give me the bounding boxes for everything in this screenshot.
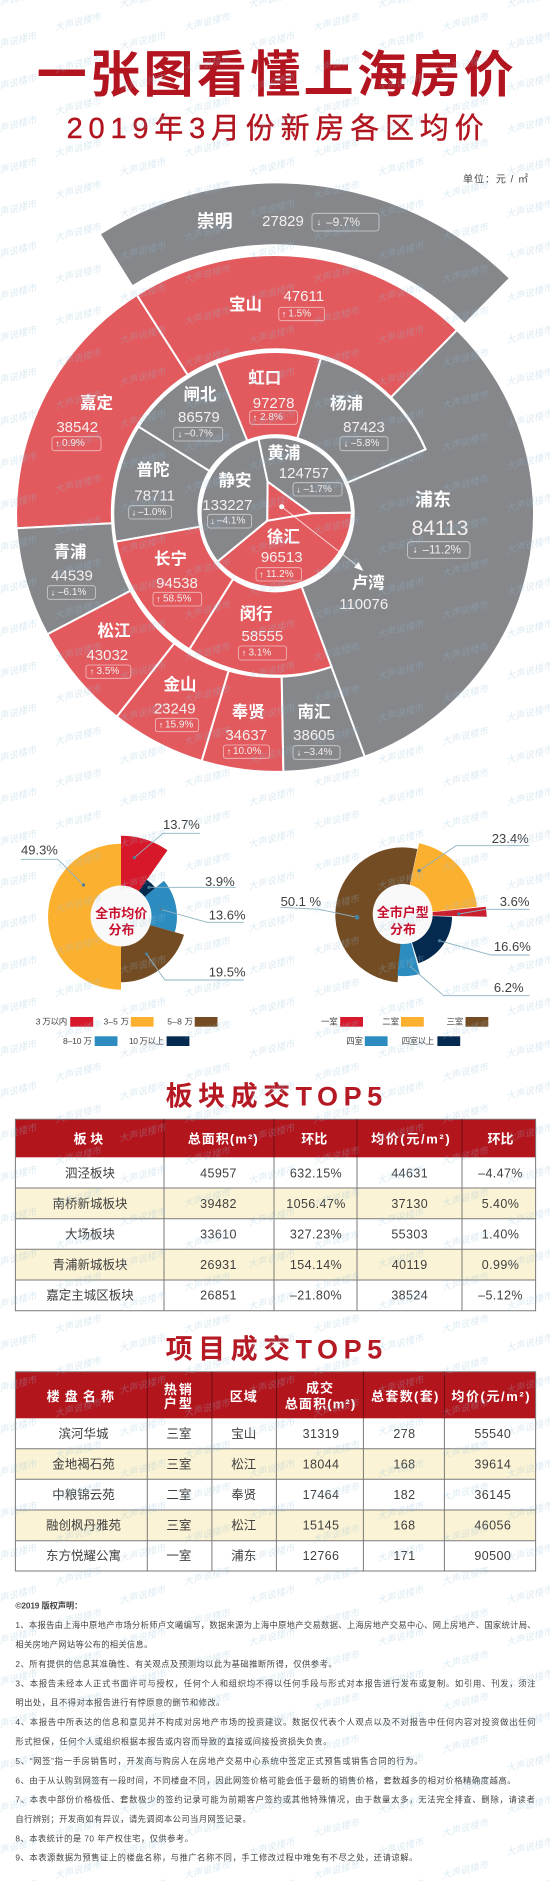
sector: 长宁 <box>116 527 233 649</box>
donut chart: citywide price distribution <box>21 817 246 1046</box>
table row: 南桥新城板块 <box>52 1196 128 1211</box>
sector: 青浦: –6.1% <box>58 587 86 598</box>
callouts: unit type distribution: 16.6% <box>494 939 531 954</box>
table row: 154.14% <box>290 1258 342 1272</box>
table row <box>46 1517 511 1532</box>
sector: 宝山: ↑ <box>282 309 286 319</box>
table row: 滨河华城 <box>58 1426 109 1441</box>
table row <box>65 1227 519 1241</box>
sector: 普陀: –1.0% <box>138 507 166 518</box>
legend: price bands <box>36 1017 217 1046</box>
sector: 松江: 3.5% <box>96 666 119 677</box>
copyright notes: 2、所有提供的信息其准确性、有关观点及预测均以此为基础推断所得，仅供参考。 <box>15 1659 337 1669</box>
copyright notes: 明出处，且不得对本报告进行有悖原意的删节和修改。 <box>15 1698 224 1708</box>
table row: 17464 <box>303 1488 339 1502</box>
callouts: price distribution: 3.9% <box>205 874 235 889</box>
table header: 区域 <box>230 1389 258 1404</box>
sector: 长宁: 94538 <box>156 575 198 592</box>
table row: 金地褐石苑 <box>52 1456 115 1471</box>
sector: 普陀 <box>113 427 209 542</box>
callouts: price distribution: 49.3% <box>21 842 58 858</box>
sector: 徐汇: 11.2% <box>266 569 294 580</box>
sector: 普陀: 78711 <box>134 488 175 504</box>
table row: 171 <box>393 1549 415 1563</box>
copyright notes: 相关房地产网站等公布的相关信息。 <box>15 1639 152 1649</box>
table: project TOP5 <box>15 1372 536 1571</box>
callouts: unit type distribution: 23.4% <box>492 831 529 846</box>
heading: project TOP5: 项目成交TOP5 <box>166 1334 382 1364</box>
sector: 浦东: 浦东 <box>415 489 451 510</box>
sector: 松江: 松江 <box>98 622 130 641</box>
legend: price bands: 5–8 万 <box>167 1017 193 1027</box>
table row: 三室 <box>166 1517 191 1532</box>
table: block TOP5 <box>15 1119 536 1311</box>
legend: unit types: 二室 <box>382 1017 400 1027</box>
legend: unit types <box>321 1017 488 1046</box>
legend: price bands: 3 万以内 <box>36 1017 67 1027</box>
sector: 金山: 23249 <box>154 700 196 718</box>
donut centre label <box>377 905 429 937</box>
table row: 浦东 <box>231 1549 256 1563</box>
table header: 均价(元/m²) <box>371 1132 450 1146</box>
table header: 热销 <box>164 1382 194 1397</box>
sector: 嘉定 <box>16 295 188 528</box>
table row: –4.47% <box>478 1166 523 1180</box>
sector: 闵行: 闵行 <box>240 604 272 623</box>
table row <box>52 1487 511 1502</box>
table row: 宝山 <box>231 1427 256 1441</box>
sector: 青浦: ↓ <box>51 588 55 598</box>
sector: 宝山: 1.5% <box>288 308 311 320</box>
table row: 55540 <box>474 1427 511 1441</box>
table row: 东方悦耀公寓 <box>46 1548 121 1563</box>
sector: 静安 <box>201 439 268 562</box>
sector: 嘉定: 38542 <box>56 419 98 436</box>
sector: 宝山: 宝山 <box>229 294 262 314</box>
sector: 普陀: ↓ <box>132 507 136 517</box>
sector: 青浦: 青浦 <box>54 542 86 562</box>
sector: 静安: –4.1% <box>217 516 245 527</box>
table row: 31319 <box>303 1427 339 1441</box>
table row: 松江 <box>231 1457 256 1471</box>
sector: 闸北: –0.7% <box>184 429 213 440</box>
sector: 浦东: 84113 <box>412 517 468 540</box>
copyright notes: 自行辨别；开发商如有异议，请先调阅本公司当月网签记录。 <box>15 1814 251 1824</box>
unit note: 单位：元 / ㎡ <box>463 172 528 186</box>
sector: 金山: 金山 <box>164 674 196 694</box>
copyright notes: 3、本报告未经本人正式书面许可与授权，任何个人和组织均不得以任何手段与形式对本报告进行发布或复制。如引用、刊发，须注 <box>15 1678 536 1688</box>
table row <box>46 1548 511 1563</box>
copyright notes: 7、本表中部份价格极低、套数极少的签约记录可能为前期客户签约或其他特殊情况，由于数量太多，无法完全排查、删除，请读者 <box>15 1795 535 1805</box>
copyright notes: 形式担保，任何个人或组织根据本报告或内容而导致的直接或间接投资损失负责。 <box>15 1737 331 1747</box>
table row: –21.80% <box>290 1289 342 1303</box>
sector: 金山: 15.9% <box>165 720 193 730</box>
donut centre label <box>95 906 147 938</box>
sector: 徐汇: ↑ <box>259 569 264 579</box>
sector: 奉贤: 10.0% <box>233 746 261 757</box>
table row: 168 <box>393 1457 415 1471</box>
table row: 168 <box>393 1518 415 1532</box>
sector: 南汇: –3.4% <box>304 747 332 758</box>
sector: 长宁: 长宁 <box>154 548 187 568</box>
sector: 杨浦: ↓ <box>344 439 348 449</box>
legend: unit types: 三室 <box>446 1017 464 1027</box>
table row: 中粮锦云苑 <box>52 1487 115 1502</box>
sector: 黄浦: 黄浦 <box>268 442 300 462</box>
table row: 36145 <box>474 1488 511 1502</box>
table row: 大场板块 <box>65 1227 115 1241</box>
table row: 1056.47% <box>286 1197 346 1211</box>
sector: 静安: 静安 <box>218 471 252 490</box>
table row <box>52 1456 511 1471</box>
table row: 嘉定主城区板块 <box>46 1288 134 1303</box>
sector: 徐汇: 96513 <box>261 549 303 566</box>
donut sectors <box>48 836 184 990</box>
table row: 278 <box>393 1427 415 1441</box>
donut sectors <box>335 843 487 982</box>
table header: 楼盘名称 <box>47 1389 114 1404</box>
sector: 崇明: ↓ <box>317 217 321 227</box>
sector: 卢湾: 卢湾 <box>352 572 385 592</box>
sector: 嘉定: ↑ <box>55 439 60 449</box>
callouts: unit type distribution: 3.6% <box>500 894 530 909</box>
sector: 黄浦: –1.7% <box>304 484 332 495</box>
sector: 南汇: ↓ <box>297 748 301 758</box>
table header <box>74 1132 514 1146</box>
legend: unit types: 四室 <box>346 1036 363 1046</box>
table row: 5.40% <box>482 1197 519 1211</box>
sector: 青浦: 44539 <box>51 568 93 584</box>
sector: 松江: ↑ <box>90 667 94 677</box>
sector: 南汇 <box>282 667 365 772</box>
callouts: price distribution: 19.5% <box>209 964 246 980</box>
table row: 12766 <box>303 1549 339 1563</box>
table row: 39614 <box>474 1457 511 1471</box>
table header: 环比 <box>487 1132 514 1146</box>
sector: 嘉定: 0.9% <box>62 438 85 449</box>
table row: 三室 <box>166 1426 191 1441</box>
sector: 闵行: 58555 <box>242 628 283 645</box>
copyright notes: 4、本报告中所表达的信息和意见并不构成对房地产市场的投资建议。数据仅代表个人观点以及不对报告中任何内容对投资做出任何 <box>15 1717 536 1727</box>
sector: 奉贤 <box>202 671 283 772</box>
sector: 卢湾: 110076 <box>339 596 388 613</box>
sector: 闸北: 86579 <box>178 409 220 426</box>
table header: 均价(元/m²) <box>451 1389 530 1404</box>
sector: 闵行: 3.1% <box>248 648 271 658</box>
legend: unit types: 一室 <box>321 1017 338 1027</box>
sector: 浦东 <box>302 330 534 757</box>
sector: 奉贤: ↑ <box>227 747 231 757</box>
table header: 户型 <box>164 1396 194 1411</box>
table header: 环比 <box>301 1132 327 1146</box>
table header <box>47 1380 530 1412</box>
sector: 杨浦: 87423 <box>343 419 385 436</box>
table row: 327.23% <box>290 1227 342 1241</box>
sector: 杨浦 <box>297 358 426 483</box>
legend: price bands: 3–5 万 <box>104 1017 129 1027</box>
sector: 金山 <box>117 643 229 761</box>
table row: 26851 <box>200 1289 237 1303</box>
legend: unit types: 四室以上 <box>402 1036 435 1046</box>
sector: 南汇: 38605 <box>293 727 335 744</box>
sector: 长宁: 58.5% <box>163 594 191 605</box>
sector: 杨浦: 杨浦 <box>330 393 363 413</box>
callouts: price distribution <box>21 817 246 980</box>
sector: 杨浦: –5.8% <box>351 438 379 449</box>
table header: 总面积(m²) <box>285 1396 355 1412</box>
table row: 182 <box>393 1488 415 1502</box>
table row <box>65 1166 523 1180</box>
sector: 闸北: ↓ <box>178 429 182 439</box>
sector: 虹口: ↑ <box>253 412 257 422</box>
sector: 南汇: 南汇 <box>298 703 330 722</box>
copyright notes: ©2019 版权声明： <box>15 1601 82 1611</box>
table row <box>52 1257 519 1272</box>
table row: 37130 <box>391 1197 428 1211</box>
copyright notes <box>15 1601 536 1863</box>
sector: 闸北: 闸北 <box>184 385 217 404</box>
subtitle: 2019年3月份新房各区均价 <box>67 112 484 145</box>
sector: 松江: 43032 <box>86 647 128 664</box>
sector: 虹口 <box>216 352 321 441</box>
table row: 40119 <box>392 1258 428 1272</box>
table header: 总面积(m²) <box>188 1132 258 1146</box>
sector: 崇明: 崇明 <box>197 212 233 232</box>
callouts: unit type distribution <box>281 831 531 996</box>
table row <box>52 1196 519 1211</box>
sector: 奉贤: 奉贤 <box>232 702 265 721</box>
table header: 板 块 <box>74 1132 103 1146</box>
donut chart: citywide unit type distribution <box>281 831 531 1046</box>
sector: 虹口: 97278 <box>253 395 294 412</box>
sector: 闵行 <box>189 579 332 676</box>
sector: 长宁: ↑ <box>156 594 161 604</box>
copyright notes: 6、由于从认购到网签有一段时间，不同楼盘不同，因此网签价格可能会低于最新的销售价格，套数越多的相对价格精确度越高。 <box>15 1775 516 1785</box>
sector: 静安: 133227 <box>202 497 252 514</box>
callouts: price distribution: 13.7% <box>163 817 200 832</box>
table row: –5.12% <box>478 1289 523 1303</box>
sector: 普陀: 普陀 <box>136 460 170 480</box>
table row: 55303 <box>391 1227 428 1241</box>
table row: 15145 <box>303 1518 339 1532</box>
table row: 奉贤 <box>231 1488 256 1502</box>
table row: 融创枫丹雅苑 <box>46 1517 121 1532</box>
table row <box>46 1288 523 1303</box>
sector: 浦东: –11.2% <box>422 544 461 556</box>
heading: block TOP5: 板块成交TOP5 <box>166 1082 382 1112</box>
table row: 44631 <box>391 1166 428 1180</box>
legend: price bands: 8–10 万 <box>63 1036 92 1046</box>
table row: 二室 <box>166 1487 191 1502</box>
sector: 徐汇: 徐汇 <box>267 526 300 546</box>
sector: 黄浦 <box>258 437 352 513</box>
sector: 崇明: –9.7% <box>326 215 360 229</box>
table row: 39482 <box>200 1197 237 1211</box>
donut centre label: 全市户型 <box>377 905 429 920</box>
table row: 26931 <box>200 1258 237 1272</box>
table row: 33610 <box>200 1227 237 1241</box>
table row: 1.40% <box>482 1227 519 1241</box>
table row: 松江 <box>231 1518 256 1532</box>
table row: 0.99% <box>482 1258 519 1272</box>
sector: 金山: ↑ <box>159 720 163 730</box>
table row <box>58 1426 511 1441</box>
table row: 45957 <box>200 1166 237 1180</box>
table row: 46056 <box>474 1518 511 1532</box>
sector: 崇明: 27829 <box>262 213 304 230</box>
sector: 青浦 <box>16 523 130 634</box>
donut centre label: 全市均价 <box>95 906 147 921</box>
sunburst chart: district average prices <box>16 183 534 772</box>
title: 一张图看懂上海房价 <box>37 47 514 103</box>
sector: 浦东: ↓ <box>412 544 418 556</box>
table row: 一室 <box>166 1548 191 1563</box>
donut centre label: 分布 <box>108 922 135 938</box>
table row: 泗泾板块 <box>65 1166 115 1180</box>
table row: 90500 <box>474 1549 511 1563</box>
sector: 虹口: 2.8% <box>260 412 283 423</box>
copyright notes: 8、本表统计的是 70 年产权住宅，仅供参考。 <box>15 1833 193 1843</box>
table row: 38524 <box>391 1289 428 1303</box>
sector: 崇明 <box>101 183 509 323</box>
donut centre label: 分布 <box>390 922 416 937</box>
sector: 宝山: 47611 <box>283 288 324 305</box>
sector: 宝山 <box>137 255 457 397</box>
sector: 黄浦: 124757 <box>279 465 329 482</box>
copyright notes: 1、本报告由上海中原地产市场分析师卢文曦编写，数据来源为上海中原地产交易数据、上海房地产交易中心、网上房地产、国家统计局、 <box>15 1620 536 1630</box>
table row: 三室 <box>166 1456 191 1471</box>
callouts: unit type distribution: 6.2% <box>494 980 524 995</box>
copyright notes: 5、“网签”指一手房销售时，开发商与购房人在房地产交易中心系统中签定正式预售或销售合同的行为。 <box>15 1756 423 1766</box>
sector: 闵行: ↑ <box>242 648 246 658</box>
sector: 闸北 <box>138 363 247 471</box>
sector: 虹口: 虹口 <box>248 368 281 387</box>
sector: 徐汇 <box>218 513 352 587</box>
copyright notes: 9、本表源数据为预售证上的楼盘名称，与推广名称不同，手工修改过程中难免有不尽之处，还请谅解。 <box>15 1853 417 1863</box>
sector: 静安: ↓ <box>210 516 215 526</box>
sector: 卢湾 <box>267 482 388 613</box>
sector: 奉贤: 34637 <box>225 727 267 744</box>
table row: 632.15% <box>290 1166 342 1180</box>
callouts: unit type distribution: 50.1 % <box>281 894 322 909</box>
callouts: price distribution: 13.6% <box>209 908 246 922</box>
sector: 黄浦: ↓ <box>296 484 301 494</box>
table row: 18044 <box>303 1457 339 1471</box>
sector: 嘉定: 嘉定 <box>80 392 113 412</box>
table header: 成交 <box>306 1380 334 1396</box>
table header: 总套数(套) <box>371 1389 438 1404</box>
sector: 松江 <box>47 591 174 717</box>
legend: price bands: 10 万以上 <box>129 1036 164 1046</box>
table row: 青浦新城板块 <box>52 1257 128 1272</box>
